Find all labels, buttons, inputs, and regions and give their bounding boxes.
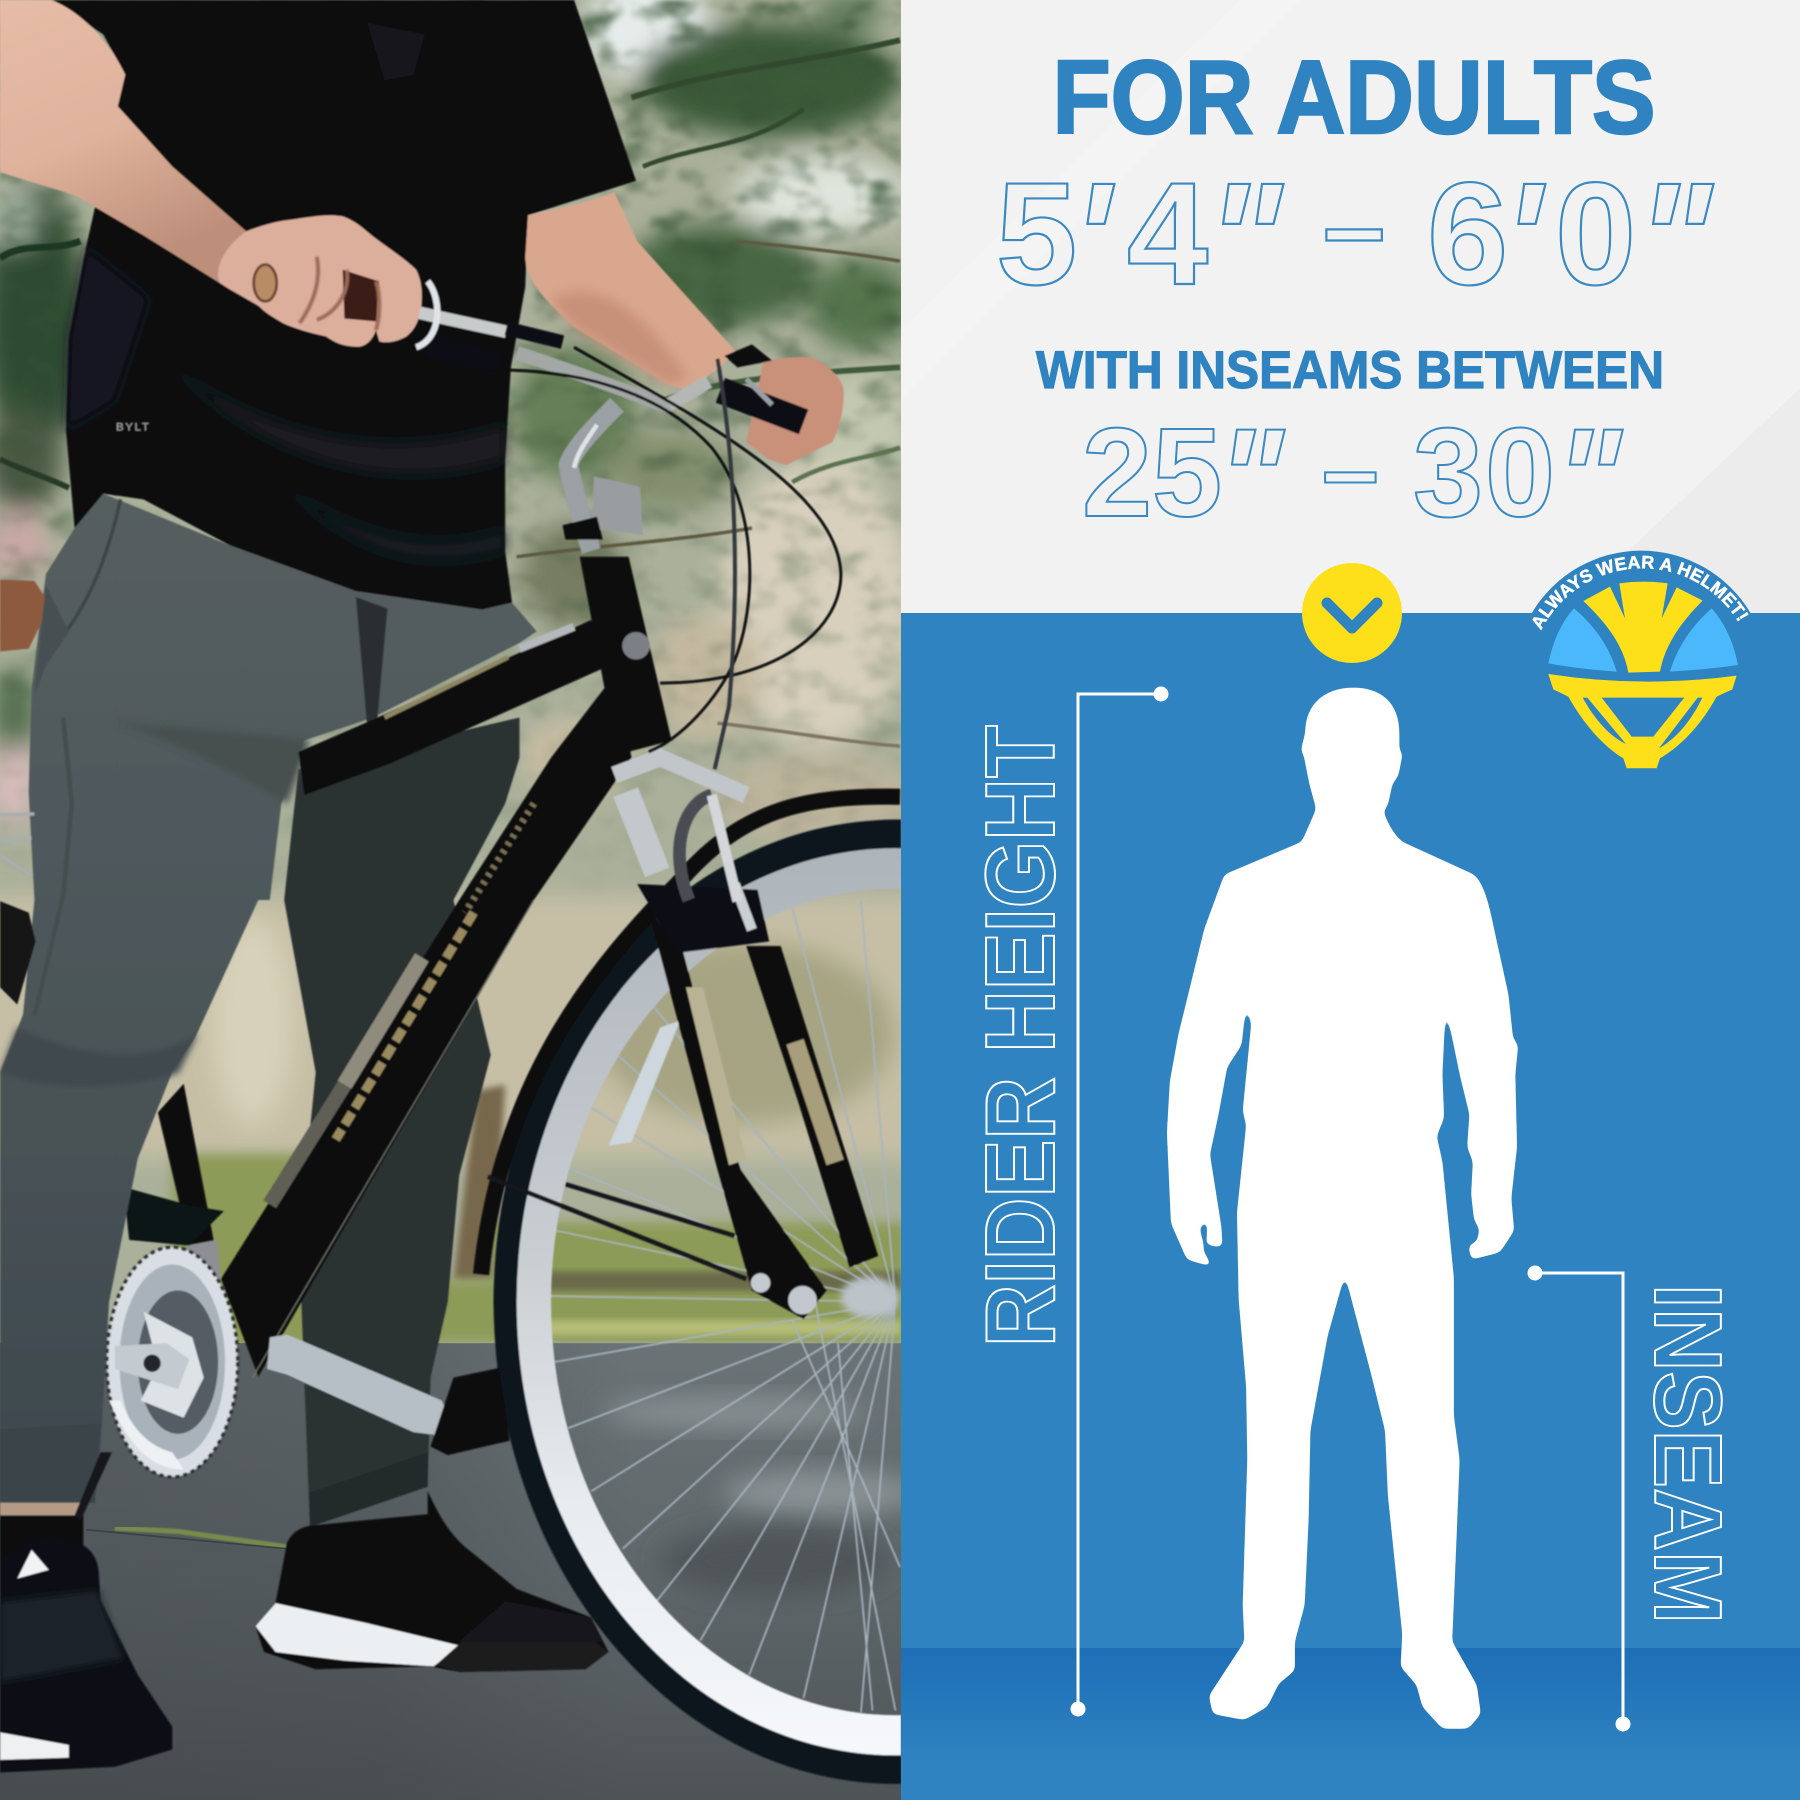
icon: yellow chevron badge [1302,563,1402,663]
down tube [221,672,631,1378]
head tube [563,517,672,755]
seat tube [158,1084,221,1281]
wristwatch [724,344,772,367]
brake and shifter cables [482,347,841,769]
rider height range: ' [1503,149,1546,328]
fork crown and brake [614,758,746,901]
rear rack [0,814,34,875]
rider height range: 0 [1555,152,1636,315]
rider height range: – [1323,164,1385,289]
inseam range: – [1322,413,1379,527]
far pant leg [284,718,519,1527]
tire [494,820,1297,1784]
crank arm [267,1335,451,1435]
reflector [591,476,643,535]
bicycle front wheel [492,818,901,1785]
far shoe [255,1491,608,1672]
figure: rider silhouette [1167,688,1518,1729]
wheel reflector [608,1021,680,1146]
far hand [746,357,844,465]
rider height range: " [1636,149,1714,328]
inseam range: " [1555,399,1623,556]
top tube [298,620,608,795]
icon: always wear a helmet badge [1532,550,1750,768]
shirt [52,0,636,610]
panel: blue sizing diagram [901,613,1800,1800]
fork [637,884,898,1319]
seat [0,580,45,651]
subheading: with inseams between: WITH INSEAMS BETWEEN [1036,341,1664,400]
shirt logo: BYLT [116,422,151,434]
rider height range: 4 [1127,152,1208,315]
chainring [107,1247,238,1477]
inseam range: 0 [1485,402,1555,543]
handlebar [416,281,804,551]
icon: always wear a helmet badge: ALWAYS WEAR A HELMET! [1532,556,1749,630]
label: rider height: RIDER HEIGHT [965,725,1075,1347]
inseam range: 3 [1413,402,1483,543]
road surface [0,1343,918,1800]
mid background: tan trees [0,895,930,1159]
inseam range: 5 [1152,402,1222,543]
near arm and hand [0,0,422,347]
white rim [515,846,901,1757]
foliage mottling [0,0,901,918]
bracket: inseam measure [1529,1267,1629,1730]
photo background: trees and grass [0,0,930,1349]
far arm [525,192,735,390]
bracket: rider height measure [1072,688,1167,1715]
rider height range: 6 [1427,152,1508,315]
rider height range: " [1206,149,1284,328]
ankle and near shoe [0,1452,172,1773]
front fender [481,797,900,1274]
panel: light sizing header [901,0,1800,613]
rear derailleur bits [123,1187,224,1246]
spokes [548,901,900,1712]
heading: for adults: FOR ADULTS [1052,40,1656,156]
label: inseam: INSEAM [1634,1284,1741,1624]
pedal [430,1368,510,1455]
photo: rider standing with a bicycle [0,0,901,1800]
inseam range: 2 [1082,402,1152,543]
near pant leg [0,494,537,1503]
grass [172,1154,907,1349]
inseam range: " [1217,399,1285,556]
rider height range: 5 [996,152,1077,315]
rider height range: ' [1072,149,1115,328]
struts [488,1177,746,1279]
